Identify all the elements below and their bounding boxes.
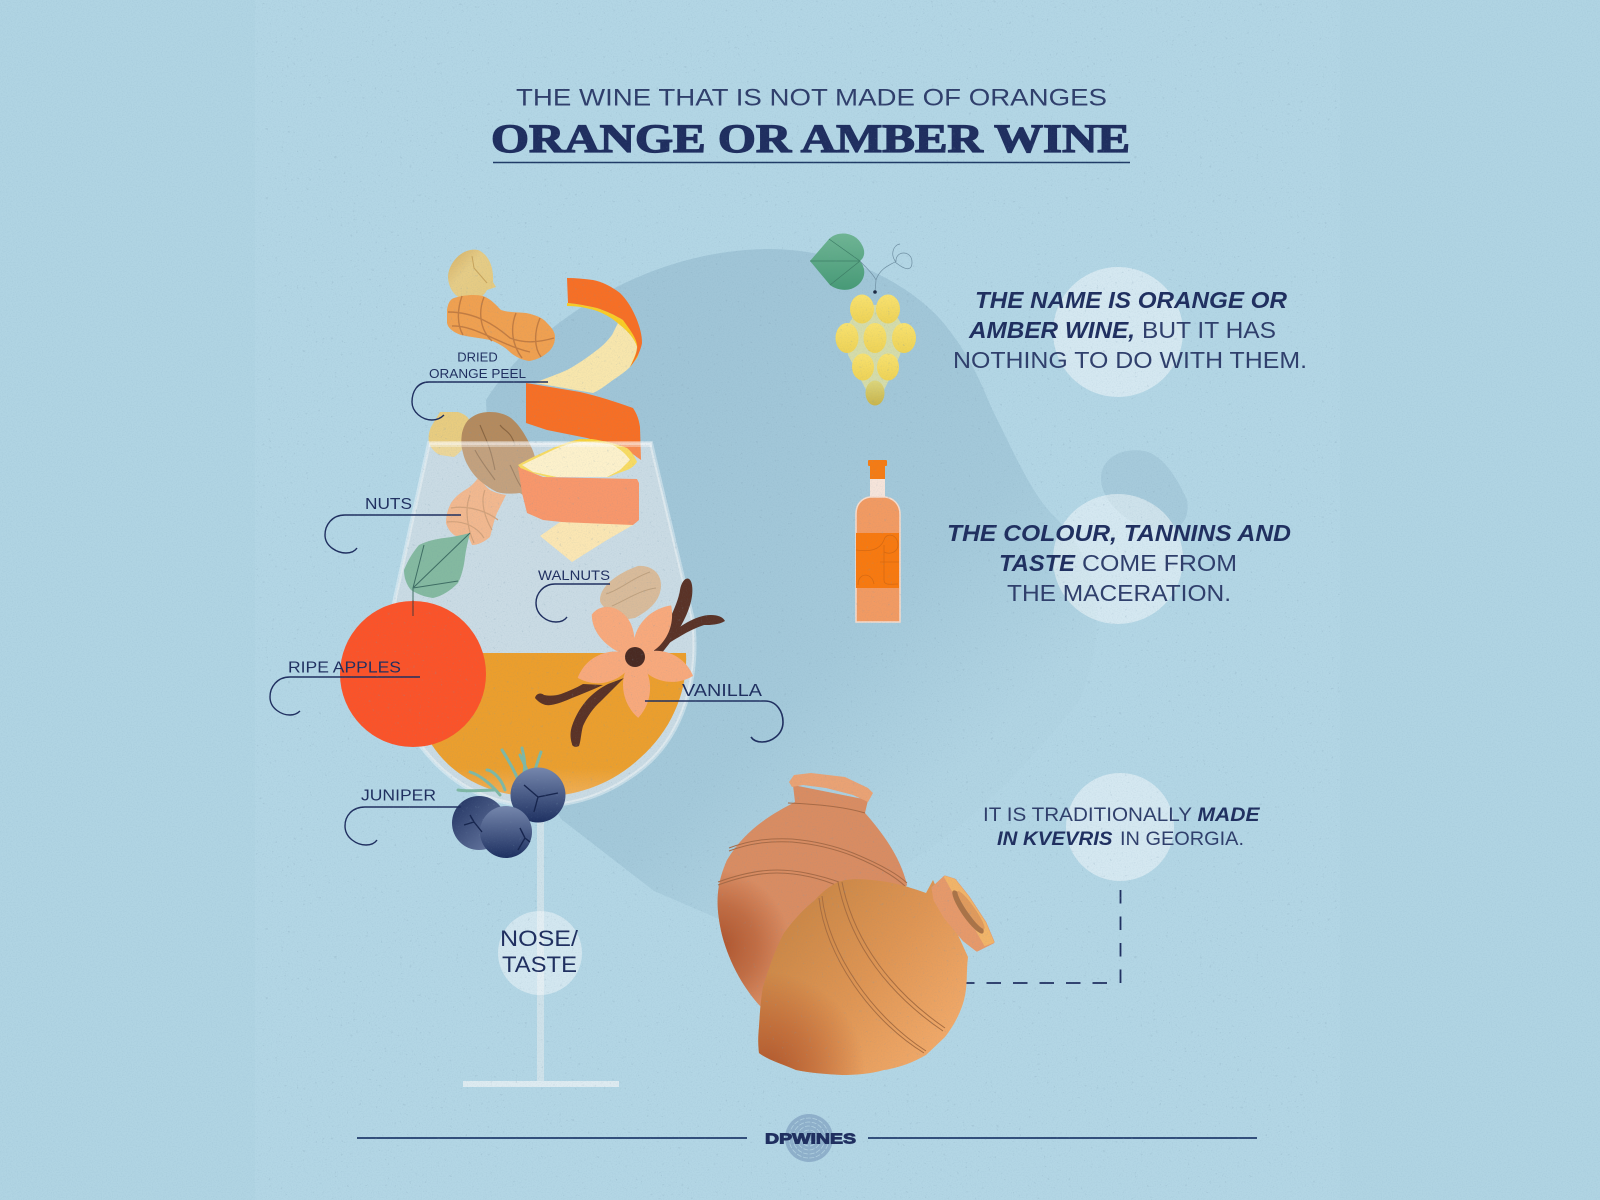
illustration: nuts and peel: [429, 250, 661, 620]
bottle body: [856, 497, 900, 622]
label: nose taste: TASTE: [502, 952, 577, 977]
panel: kvevri text: [983, 773, 1261, 881]
shadow blob: [1101, 450, 1188, 530]
icon: small walnut: [600, 566, 661, 620]
footer line right: [868, 1137, 1257, 1139]
panel: name text: AMBER WINE,: [968, 317, 1135, 343]
salmon band: [518, 467, 639, 525]
label: nose taste: [500, 926, 579, 977]
flower center: [625, 647, 645, 667]
panel: name text: [953, 267, 1307, 397]
title block: [491, 84, 1130, 162]
front jar: [758, 877, 993, 1075]
logo text: DPWINES: [765, 1130, 856, 1148]
vanilla pods: [535, 579, 725, 747]
berry front: [480, 806, 532, 858]
subtitle: THE WINE THAT IS NOT MADE OF ORANGES: [516, 84, 1107, 112]
icon: grape bunch: [836, 294, 916, 406]
footer: [357, 1114, 1257, 1162]
label circle: [1053, 267, 1183, 397]
panel: name text: NOTHING TO DO WITH THEM.: [953, 347, 1307, 373]
icon: pale nut second: [429, 412, 470, 457]
label: vanilla: VANILLA: [682, 680, 762, 700]
icon: kvevri jars: [718, 773, 993, 1075]
label: juniper: [345, 788, 461, 845]
apple stem line: [412, 600, 414, 616]
label: ripe apples: [270, 660, 420, 715]
panel: colour text: [947, 494, 1291, 624]
label: dried orange peel: [412, 350, 548, 420]
panel: colour text: COME FROM: [1082, 550, 1237, 576]
paper speckles: [255, 0, 1340, 1200]
label circle: nose taste: [498, 911, 582, 995]
panel: kvevri text: IT IS TRADITIONALLY: [983, 805, 1192, 826]
berry left: [452, 796, 506, 850]
bottle neck glass: [870, 479, 885, 497]
icon: walnut large: [461, 412, 535, 500]
jar mouth rim: [933, 877, 993, 950]
bottle neck top: [870, 466, 885, 479]
icon: leaf: [404, 533, 470, 616]
dashed connector: [960, 890, 1120, 983]
cream middle band: [522, 442, 630, 477]
grapes: [836, 294, 916, 380]
icon: vanilla flower: [535, 579, 725, 747]
label: nuts: NUTS: [365, 496, 412, 513]
petals: [573, 597, 697, 719]
title underline: [493, 162, 1130, 164]
label: nose taste: NOSE/: [500, 926, 579, 951]
panel: colour text: THE COLOUR, TANNINS AND: [947, 520, 1291, 546]
label: dried orange peel: DRIED: [457, 350, 498, 364]
bottle cap: [868, 460, 887, 466]
icon: peanut top: [447, 295, 555, 361]
label: walnuts: [536, 567, 610, 622]
label: vanilla: [645, 680, 783, 742]
panel: colour text: THE MACERATION.: [1007, 580, 1231, 606]
yellow edge: [567, 303, 639, 367]
label: nuts: [325, 496, 461, 553]
main title: ORANGE OR AMBER WINE: [491, 116, 1130, 161]
logo fingerprint: [785, 1114, 833, 1162]
icon: grape leaf and tendril: [810, 233, 912, 294]
cream upper band: [535, 323, 637, 393]
cream lower band: [540, 522, 633, 562]
panel: colour text: TASTE: [999, 550, 1076, 576]
icon: pale nut top: [448, 250, 496, 300]
orange middle band: [526, 383, 641, 460]
wavy glass shadow shape: [486, 249, 1097, 928]
back jar lip: [789, 773, 873, 802]
orange top band: [567, 278, 642, 367]
footer line left: [357, 1137, 747, 1139]
icon: peanut lower: [446, 477, 506, 545]
panel: name text: BUT IT HAS: [1142, 317, 1276, 343]
bottle label: [856, 533, 899, 588]
wine: [400, 653, 686, 797]
glass bowl: [392, 443, 694, 806]
icon: juniper: [452, 748, 566, 858]
panel: kvevri text: MADE: [1198, 805, 1261, 826]
panel: name text: THE NAME IS ORANGE OR: [975, 287, 1287, 313]
back jar: [718, 773, 907, 1007]
yellow edge middle: [518, 439, 637, 477]
panel: kvevri text: IN GEORGIA.: [1120, 829, 1244, 850]
icon: wine bottle: [856, 460, 900, 622]
background panel: [255, 0, 1340, 1200]
bunch backing: [845, 305, 905, 398]
icon: orange peel spiral: [518, 278, 642, 562]
label circle: [1066, 773, 1174, 881]
label: dried orange peel: ORANGE PEEL: [429, 366, 526, 381]
panel: kvevri text: IN KVEVRIS: [997, 829, 1113, 850]
label: ripe apples: RIPE APPLES: [288, 660, 401, 676]
glass bowl base: [392, 443, 694, 806]
label circle: [1053, 494, 1183, 624]
label: walnuts: WALNUTS: [538, 567, 610, 583]
glass rim: [429, 442, 652, 447]
stem of the glass: [463, 800, 619, 1087]
needles: [458, 748, 541, 795]
label: juniper: JUNIPER: [361, 788, 436, 804]
icon: ripe apple: [340, 601, 486, 747]
berry right: [510, 768, 566, 822]
